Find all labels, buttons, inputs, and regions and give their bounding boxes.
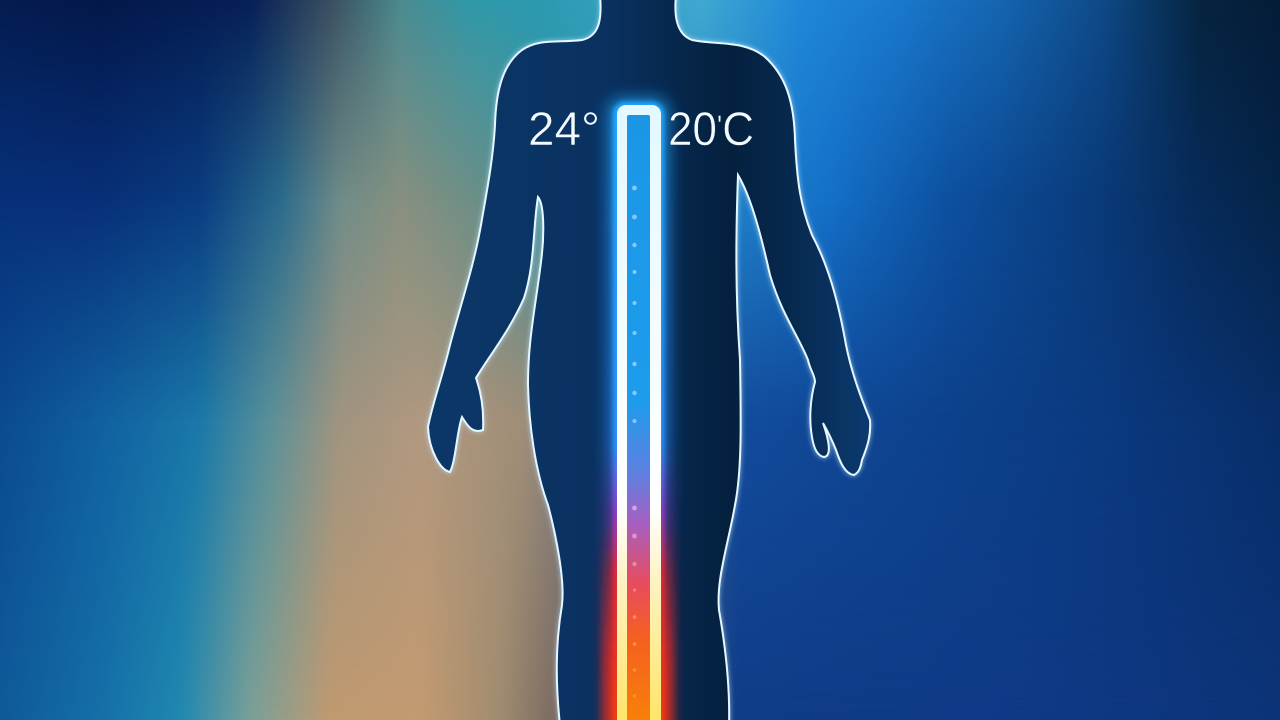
thermometer tube (603, 98, 673, 720)
temperature label: 20'C: ' (717, 110, 722, 143)
thermometer bubbles (632, 186, 637, 698)
human body silhouette (428, 0, 870, 720)
temperature label: 20'C: 20 (668, 102, 720, 155)
temperature label: 20'C: C (722, 102, 754, 155)
temperature label: 24°: 24° (528, 102, 600, 155)
